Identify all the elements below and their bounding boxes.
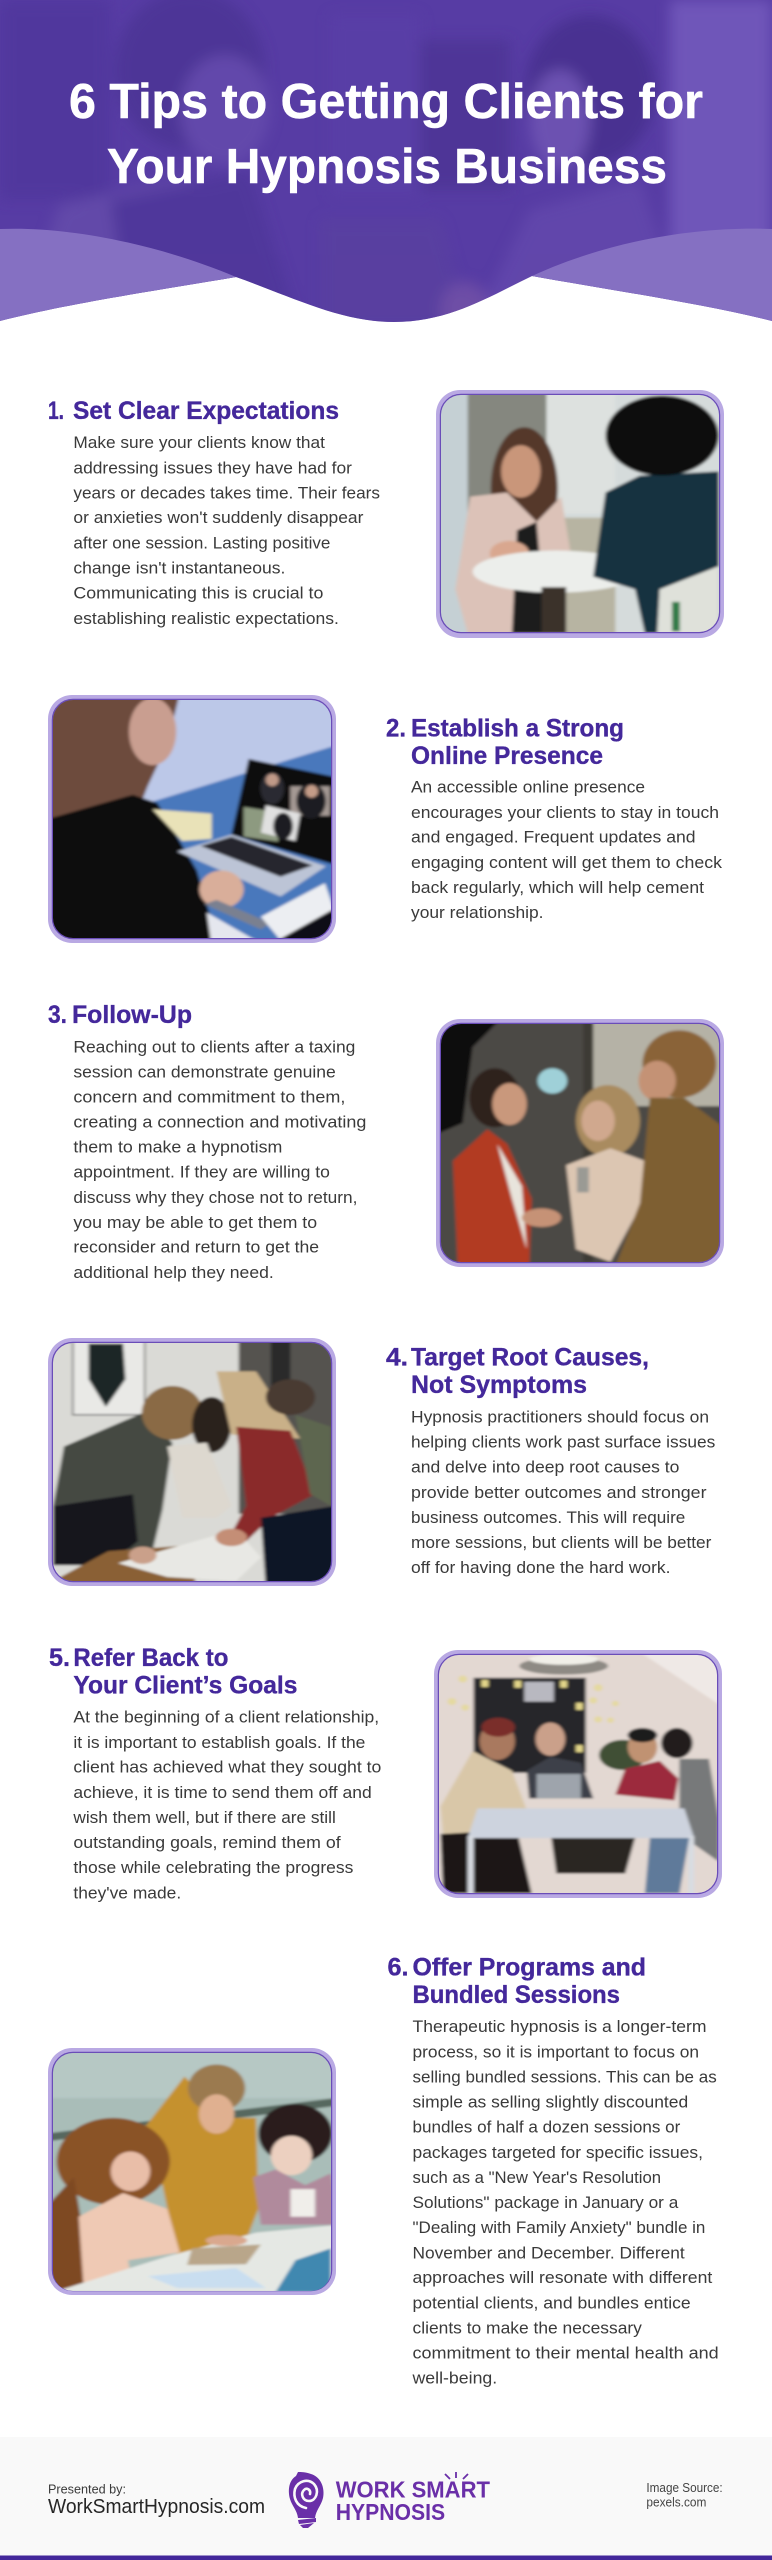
tip 6 text: approaches will resonate with different xyxy=(412,2269,713,2287)
tip 6 text: clients to make the necessary xyxy=(412,2319,643,2337)
tip 1 text xyxy=(73,434,380,628)
photo: team meeting at a white table xyxy=(433,1648,729,1901)
image source text: pexels.com xyxy=(646,2496,706,2510)
title: 6 Tips to Getting Clients for xyxy=(69,75,703,129)
tip 4 heading xyxy=(386,1344,649,1399)
tip 1 text: establishing realistic expectations. xyxy=(73,610,339,628)
tip 2 text: and engaged. Frequent updates and xyxy=(411,829,696,847)
tip 3 text: you may be able to get them to xyxy=(73,1214,317,1232)
tip 3 text: Reaching out to clients after a taxing xyxy=(73,1038,355,1056)
tip 5 heading: 5. xyxy=(49,1644,70,1672)
tip 3 text: session can demonstrate genuine xyxy=(73,1064,336,1082)
tip 2 heading: Establish a Strong xyxy=(411,715,624,743)
tip 2 text: encourages your clients to stay in touch xyxy=(411,804,719,822)
tip 4 text: provide better outcomes and stronger xyxy=(411,1484,707,1502)
tip 6 text: November and December. Different xyxy=(412,2244,685,2262)
photo: two women talking at a table xyxy=(433,387,729,640)
tip 6 heading: 6. xyxy=(388,1954,408,1982)
image source text: Image Source: xyxy=(646,2481,723,2495)
tip 5 heading: Refer Back to xyxy=(73,1644,228,1672)
light wave left xyxy=(0,229,236,321)
tip 5 text: it is important to establish goals. If the xyxy=(73,1734,365,1752)
tip 3 heading: 3. xyxy=(48,1001,67,1029)
tip 4 heading: 4. xyxy=(386,1344,408,1372)
tip 6 text: well-being. xyxy=(411,2370,497,2388)
tip 4 text: helping clients work past surface issues xyxy=(411,1434,715,1452)
tip 1 text: after one session. Lasting positive xyxy=(73,534,330,552)
tip 6 text: commitment to their mental health and xyxy=(412,2345,719,2363)
tip 4 text: more sessions, but clients will be better xyxy=(411,1534,712,1552)
photo: woman on a video call xyxy=(44,694,340,946)
tip 6 heading: Offer Programs and xyxy=(412,1954,646,1982)
tip 4 text xyxy=(411,1408,715,1577)
tip 1 text: or anxieties won't suddenly disappear xyxy=(73,509,364,527)
presented by text xyxy=(48,2482,265,2518)
header photo with purple tint xyxy=(0,0,772,338)
tip 6 text: Solutions" package in January or a xyxy=(412,2194,679,2212)
tip 6 text: "Dealing with Family Anxiety" bundle in xyxy=(412,2219,705,2237)
tip 6 text: process, so it is important to focus on xyxy=(412,2043,699,2061)
tip 2 panel xyxy=(44,694,723,946)
tip 6 text: potential clients, and bundles entice xyxy=(412,2294,691,2312)
tip 3 text: additional help they need. xyxy=(73,1264,274,1282)
tip 5 text: outstanding goals, remind them of xyxy=(73,1834,341,1852)
tip 6 heading: Bundled Sessions xyxy=(412,1981,620,2009)
tip 6 text: such as a "New Year's Resolution xyxy=(412,2169,661,2187)
icon: hypnosis light bulb logo xyxy=(289,2472,324,2528)
tip 2 text: back regularly, which will help cement xyxy=(411,879,704,897)
tip 6 heading xyxy=(388,1954,646,2009)
tip 5 text: wish them well, but if there are still xyxy=(72,1809,336,1827)
tip 4 heading: Not Symptoms xyxy=(411,1371,587,1399)
tip 5 text xyxy=(72,1708,381,1902)
tip 3 text: appointment. If they are willing to xyxy=(73,1164,330,1182)
tip 3 text: them to make a hypnotism xyxy=(73,1138,282,1156)
tip 6 text: bundles of half a dozen sessions or xyxy=(412,2119,681,2137)
tip 1 text: years or decades takes time. Their fears xyxy=(73,484,380,502)
tip 1 text: Make sure your clients know that xyxy=(73,434,325,452)
tip 5 text: those while celebrating the progress xyxy=(73,1859,353,1877)
tip 2 heading: Online Presence xyxy=(411,742,603,770)
tip 6 text: packages targeted for specific issues, xyxy=(412,2144,703,2162)
tip 6 text: simple as selling slightly discounted xyxy=(412,2094,688,2112)
tip 3 text: concern and commitment to them, xyxy=(73,1088,345,1106)
tip 4 panel xyxy=(44,1336,715,1589)
tip 6 text: selling bundled sessions. This can be as xyxy=(412,2068,717,2086)
tip 1 heading: 1. xyxy=(48,397,64,425)
photo: three students around a tablet xyxy=(44,2047,340,2300)
tip 5 text: client has achieved what they sought to xyxy=(73,1759,381,1777)
tip 5 heading: Your Client’s Goals xyxy=(73,1672,297,1700)
photo: three people talking xyxy=(433,1018,729,1270)
photo: team around a table xyxy=(44,1336,340,1589)
title xyxy=(69,75,703,194)
tip 4 heading: Target Root Causes, xyxy=(411,1344,649,1372)
title: Your Hypnosis Business xyxy=(107,140,667,194)
tip 2 text: An accessible online presence xyxy=(411,779,645,797)
tip 6 text xyxy=(411,2018,719,2388)
footer xyxy=(0,2437,772,2560)
tip 2 text: engaging content will get them to check xyxy=(411,854,723,872)
header banner xyxy=(0,0,772,338)
tip 2 text: your relationship. xyxy=(411,904,544,922)
tip 4 text: off for having done the hard work. xyxy=(411,1559,670,1577)
tip 4 text: and delve into deep root causes to xyxy=(411,1459,679,1477)
tip 4 text: Hypnosis practitioners should focus on xyxy=(411,1408,709,1426)
tip 1 text: addressing issues they have had for xyxy=(73,460,353,478)
tip 5 text: At the beginning of a client relationship, xyxy=(73,1708,379,1726)
logo wordmark: HYPNOSIS xyxy=(336,2499,445,2525)
light wave right xyxy=(532,229,772,321)
tip 3 text: reconsider and return to get the xyxy=(73,1239,319,1257)
tip 2 heading: 2. xyxy=(386,715,406,743)
logo wordmark xyxy=(336,2472,490,2525)
tip 6 panel xyxy=(44,1954,719,2388)
tip 3 text: discuss why they chose not to return, xyxy=(73,1189,357,1207)
tip 5 text: they've made. xyxy=(73,1884,181,1902)
image source text xyxy=(646,2481,723,2510)
presented by text: WorkSmartHypnosis.com xyxy=(48,2495,265,2518)
tip 1 heading: Set Clear Expectations xyxy=(73,397,339,425)
tip 2 text xyxy=(411,779,723,922)
tip 3 text xyxy=(73,1038,366,1282)
tip 5 panel xyxy=(49,1644,729,1902)
tip 1 text: Communicating this is crucial to xyxy=(73,584,323,602)
tip 5 heading xyxy=(49,1644,297,1700)
tip 6 text: Therapeutic hypnosis is a longer-term xyxy=(412,2018,706,2036)
tip 1 panel xyxy=(48,387,729,640)
presented by text: Presented by: xyxy=(48,2482,126,2497)
tip 5 text: achieve, it is time to send them off and xyxy=(73,1784,372,1802)
tip 3 text: creating a connection and motivating xyxy=(73,1114,366,1132)
logo wordmark: WORK SMART xyxy=(336,2477,490,2503)
tip 4 text: business outcomes. This will require xyxy=(411,1509,685,1527)
tip 3 heading: Follow-Up xyxy=(72,1001,192,1029)
tip 2 heading xyxy=(386,715,624,770)
tip 3 panel xyxy=(48,1001,729,1282)
tip 1 text: change isn't instantaneous. xyxy=(73,560,285,578)
